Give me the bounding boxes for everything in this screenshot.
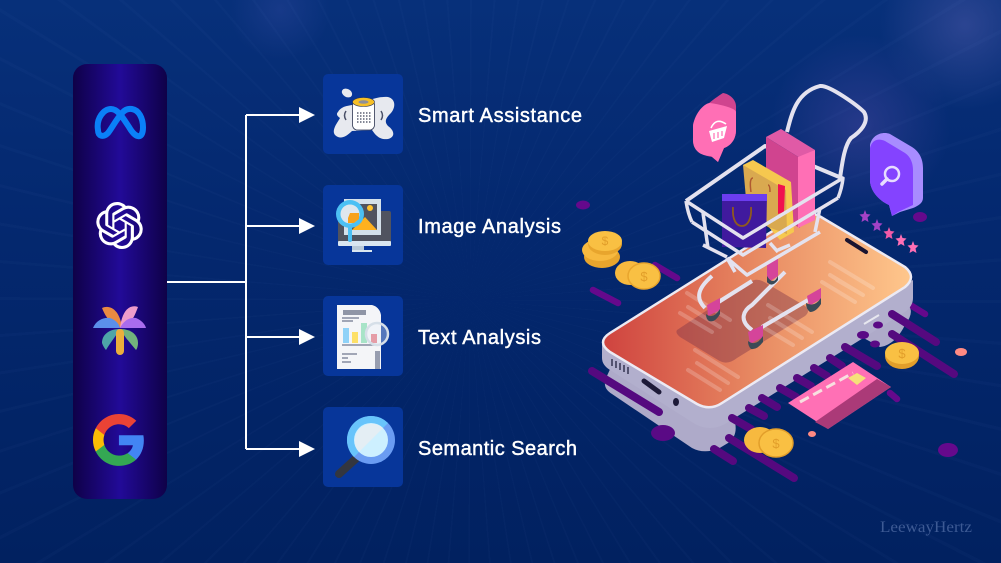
arrows: connector tree xyxy=(167,107,315,457)
stars xyxy=(860,210,918,253)
tile: Smart Assistance icon xyxy=(323,74,403,154)
icon: Meta logo xyxy=(98,109,143,136)
coin: right xyxy=(885,342,919,369)
label: Image Analysis: Image Analysis xyxy=(418,216,561,238)
credit card xyxy=(788,362,891,429)
tile: Text Analysis icon xyxy=(323,296,403,376)
phone: screen xyxy=(603,213,911,407)
bag: purple bag xyxy=(722,194,767,248)
icon: palm tree logo xyxy=(93,306,146,355)
tile: Semantic Search icon xyxy=(323,407,403,487)
watermark: LeewayHertz xyxy=(880,519,972,536)
decorative purple stripes behind phone xyxy=(576,200,958,457)
coins: bottom: $ xyxy=(772,436,780,451)
label: Semantic Search: Semantic Search xyxy=(418,438,577,460)
cart: handle and back rim xyxy=(686,86,866,201)
illustration: shopping cart on smartphone xyxy=(576,86,967,478)
cart: front wires and basket xyxy=(686,178,843,275)
coin: right: $ xyxy=(898,346,906,361)
speech bubble: purple search xyxy=(870,133,923,216)
tile: Image Analysis icon xyxy=(323,185,403,265)
coins: bottom xyxy=(744,427,793,457)
coins: left stack: $ xyxy=(602,234,609,248)
cart: legs and wheels xyxy=(699,258,821,349)
label: Smart Assistance: Smart Assistance xyxy=(418,105,582,127)
phone: back plate right xyxy=(860,305,911,347)
panel: AI model logos xyxy=(73,64,167,499)
speech bubble: pink basket xyxy=(693,93,736,162)
bag: yellow bag xyxy=(743,160,794,240)
stripes over phone side xyxy=(592,314,954,478)
coins: left stack xyxy=(582,231,660,289)
icon: OpenAI logo xyxy=(96,202,143,249)
label: Text Analysis: Text Analysis xyxy=(418,327,541,349)
salmon dots xyxy=(808,348,967,437)
phone: details xyxy=(612,240,879,406)
icon: Google logo xyxy=(93,414,144,466)
bag: pink box xyxy=(766,129,815,228)
coins: left stack: $ xyxy=(640,269,648,284)
phone: body side xyxy=(602,280,913,428)
phone: back plate left xyxy=(605,365,736,451)
